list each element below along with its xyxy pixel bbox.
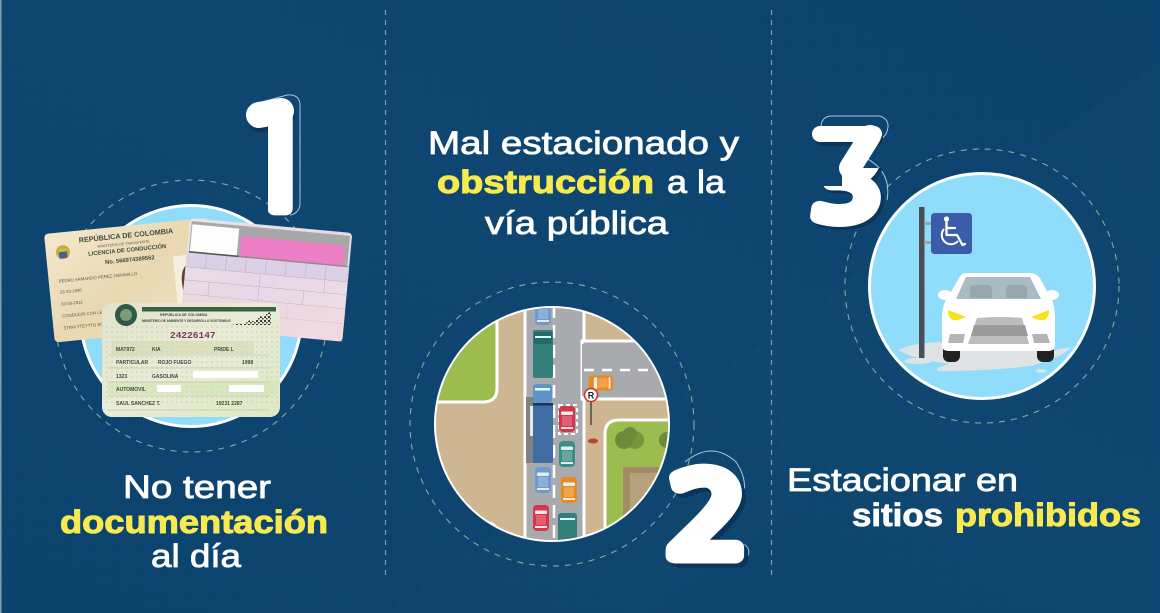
panel: no tener documentación (44, 95, 352, 574)
text: no tener documentación al día (60, 469, 328, 574)
dashed ring 3 (845, 149, 1119, 423)
bushes (615, 427, 668, 449)
icon: green property card: MINISTERIO DE AMBIENTE Y DESARROLLO SOSTENIBLE (142, 319, 231, 323)
text: mal estacionado y obstrucción: Mal estacionado y (428, 125, 739, 161)
icon: conduction licence card: No. 566974389562 (105, 255, 155, 266)
text: mal estacionado y obstrucción: obstrucción (437, 164, 654, 200)
text: estacionar en sitios prohibidos: sitios (852, 497, 943, 533)
text: mal estacionado y obstrucción: vía pública (485, 205, 668, 241)
icon: conduction licence card: CONDUCIR CON LENTES (62, 308, 114, 319)
text: estacionar en sitios prohibidos: prohibidos (955, 497, 1141, 533)
green lot right (604, 418, 668, 528)
icon: green property card: PARTICULAR (116, 360, 149, 366)
icon: conduction licence card: MINISTERIO DE TRANSPORTE (97, 239, 150, 249)
panel: mal estacionado (410, 125, 753, 578)
numeral 3: 3 (810, 133, 884, 236)
icon: green property card: AUTOMOVIL (116, 387, 146, 393)
icon: green property card: PRIDE L (214, 347, 234, 353)
icon: pink transit card (180, 218, 352, 342)
icon: conduction licence card: PEDRO ARMANDO PEREZ JARAMILLO (59, 271, 138, 284)
pedestrian (588, 438, 598, 444)
puddle (898, 342, 1071, 371)
dashed ring 2 (410, 282, 694, 566)
icon: green property card: ROJO FUEGO (158, 360, 191, 366)
icon: conduction licence card: 23-03-1990 (60, 287, 83, 295)
text: mal estacionado y obstrucción (428, 125, 739, 241)
main road (525, 300, 584, 550)
numeral 1 (246, 94, 300, 216)
icon: green property card: KIA (152, 347, 161, 353)
dashed ring 1 (55, 180, 327, 452)
no-parking sign (584, 388, 598, 425)
pole (919, 207, 924, 358)
text: no tener documentación al día: al día (151, 538, 241, 574)
circle 1 (80, 206, 302, 426)
numeral 3: 3 (813, 136, 887, 239)
side road (580, 340, 666, 400)
icon: green property card: MAT972 (116, 347, 135, 353)
icon: conduction licence card: STRIA TTEYTTO BOG (63, 321, 108, 331)
numeral 2: 2 (669, 465, 753, 578)
icon: wheelchair sign (931, 213, 972, 254)
vehicles (535, 308, 551, 325)
car (938, 273, 1059, 362)
icon: green property card: REPÚBLICA DE COLOMBIA (160, 312, 208, 317)
icon: green property card: 1323 (116, 374, 127, 380)
icon: conduction licence card (44, 218, 219, 342)
icon: conduction licence card: REPÚBLICA DE COLOMBIA (78, 226, 174, 245)
icon: green property card: SAUL SANCHEZ T. (116, 401, 161, 407)
numeral 1: 1 (236, 96, 318, 230)
icon: conduction licence card: 03-09-2011 (61, 299, 83, 307)
shadow of bus (526, 397, 534, 463)
text: no tener documentación al día: No tener (123, 469, 271, 505)
panel: estacionar en sitios prohibidos (787, 116, 1141, 533)
text: estacionar en sitios prohibidos (787, 462, 1141, 533)
road map illustration (434, 306, 670, 542)
icon: conduction licence card: LICENCIA DE CONDUCCIÓN (88, 242, 167, 258)
numeral 2: 2 (665, 461, 749, 574)
icon: green property card: 24226147 (170, 330, 216, 341)
text: mal estacionado y obstrucción: a la (667, 164, 725, 200)
green lot top left (438, 321, 498, 404)
no-parking sign: R (588, 390, 595, 400)
text: estacionar en sitios prohibidos: Estacionar en (787, 462, 1018, 498)
circle 3 with car (870, 174, 1094, 398)
icon: green property card (102, 303, 280, 417)
text: no tener documentación al día: documentación (60, 504, 328, 540)
icon: green property card: GASOLINA (152, 374, 179, 380)
icon: green property card: 19231 2287 (216, 401, 243, 407)
icon: green property card: 1998 (242, 360, 253, 366)
